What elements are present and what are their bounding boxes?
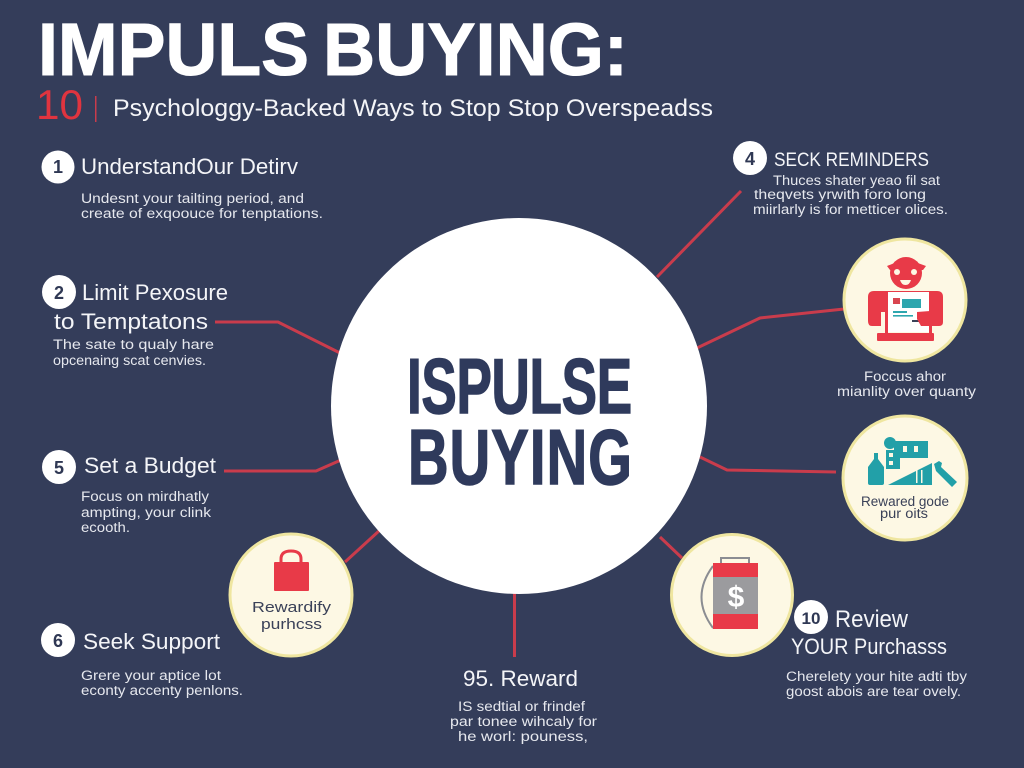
icon: teal rewards: Rewared gode — [861, 494, 949, 509]
item 5: ecooth. — [81, 520, 130, 535]
item 10 — [786, 600, 967, 699]
title: IMPULS — [38, 8, 309, 91]
item 5: Focus on mirdhatly — [81, 489, 209, 504]
item 10: Review — [835, 606, 909, 633]
item 2: opcenaing scat cenvies. — [53, 353, 206, 368]
icon: money canister — [672, 534, 792, 656]
item 6 — [41, 623, 243, 698]
icon: shopping bag: purhcss — [261, 616, 322, 633]
item 10: YOUR Purchasss — [791, 634, 947, 659]
connector lines — [215, 191, 844, 657]
item 1: Undesnt your tailting period, and — [81, 191, 304, 206]
item 4: miirlarly is for metticer olices. — [753, 202, 948, 217]
item 1: create of exqoouce for tenptations. — [81, 206, 323, 221]
item 5 — [42, 450, 216, 535]
item 5: Set a Budget — [84, 453, 216, 478]
item 2: The sate to qualy hare — [53, 337, 214, 352]
item 2: to Temptatons — [54, 309, 208, 334]
subtitle: 10 — [36, 81, 83, 128]
item 9 reward: IS sedtial or frindef — [458, 699, 585, 714]
central circle: BUYING — [408, 414, 632, 501]
icon: person with document: Foccus ahor — [864, 369, 947, 384]
item 4 — [733, 141, 948, 217]
item 4: theqvets yrwith foro long — [754, 187, 926, 202]
item 2: Limit Pexosure — [82, 280, 228, 305]
icon: person with document: mianlity over quanty — [837, 384, 976, 399]
item 9 reward: he worl: pouness, — [458, 729, 588, 744]
item 6: econty accenty penlons. — [81, 683, 243, 698]
icon: teal rewards: pur oits — [880, 506, 928, 521]
item 5: ampting, your clink — [81, 505, 211, 520]
item 4: 4 — [745, 149, 755, 169]
central circle — [331, 218, 707, 594]
title — [38, 8, 628, 91]
item 1 — [42, 150, 323, 221]
item 6: Seek Support — [83, 629, 220, 654]
icon: person with document — [837, 239, 976, 399]
item 2: 2 — [54, 283, 64, 303]
item 10: Cherelety your hite adti tby — [786, 669, 967, 684]
title: BUYING: — [323, 8, 628, 91]
central circle: ISPULSE — [407, 344, 632, 431]
item 9 reward: par tonee wihcaly for — [450, 714, 598, 729]
subtitle: Psychologgy-Backed Ways to Stop Stop Overspeadss — [113, 95, 713, 122]
icon: shopping bag — [230, 534, 352, 656]
item 4: SECK REMINDERS — [774, 150, 929, 171]
item 5: 5 — [54, 458, 64, 478]
icon: teal rewards — [843, 416, 967, 540]
item 1: 1 — [53, 157, 63, 177]
item 1: UnderstandOur Detirv — [81, 154, 298, 179]
item 10: 10 — [802, 609, 820, 628]
item 6: 6 — [53, 631, 63, 651]
item 4: Thuces shater yeao fil sat — [773, 173, 940, 188]
icon: shopping bag: Rewardify — [252, 599, 332, 616]
subtitle — [36, 81, 713, 128]
item 9 reward — [450, 666, 598, 744]
item 2 — [42, 275, 228, 368]
item 9 reward: 95. Reward — [463, 666, 578, 691]
item 6: Grere your aptice lot — [81, 668, 221, 683]
icon: money canister: $ — [728, 581, 745, 614]
item 10: goost abois are tear ovely. — [786, 684, 961, 699]
